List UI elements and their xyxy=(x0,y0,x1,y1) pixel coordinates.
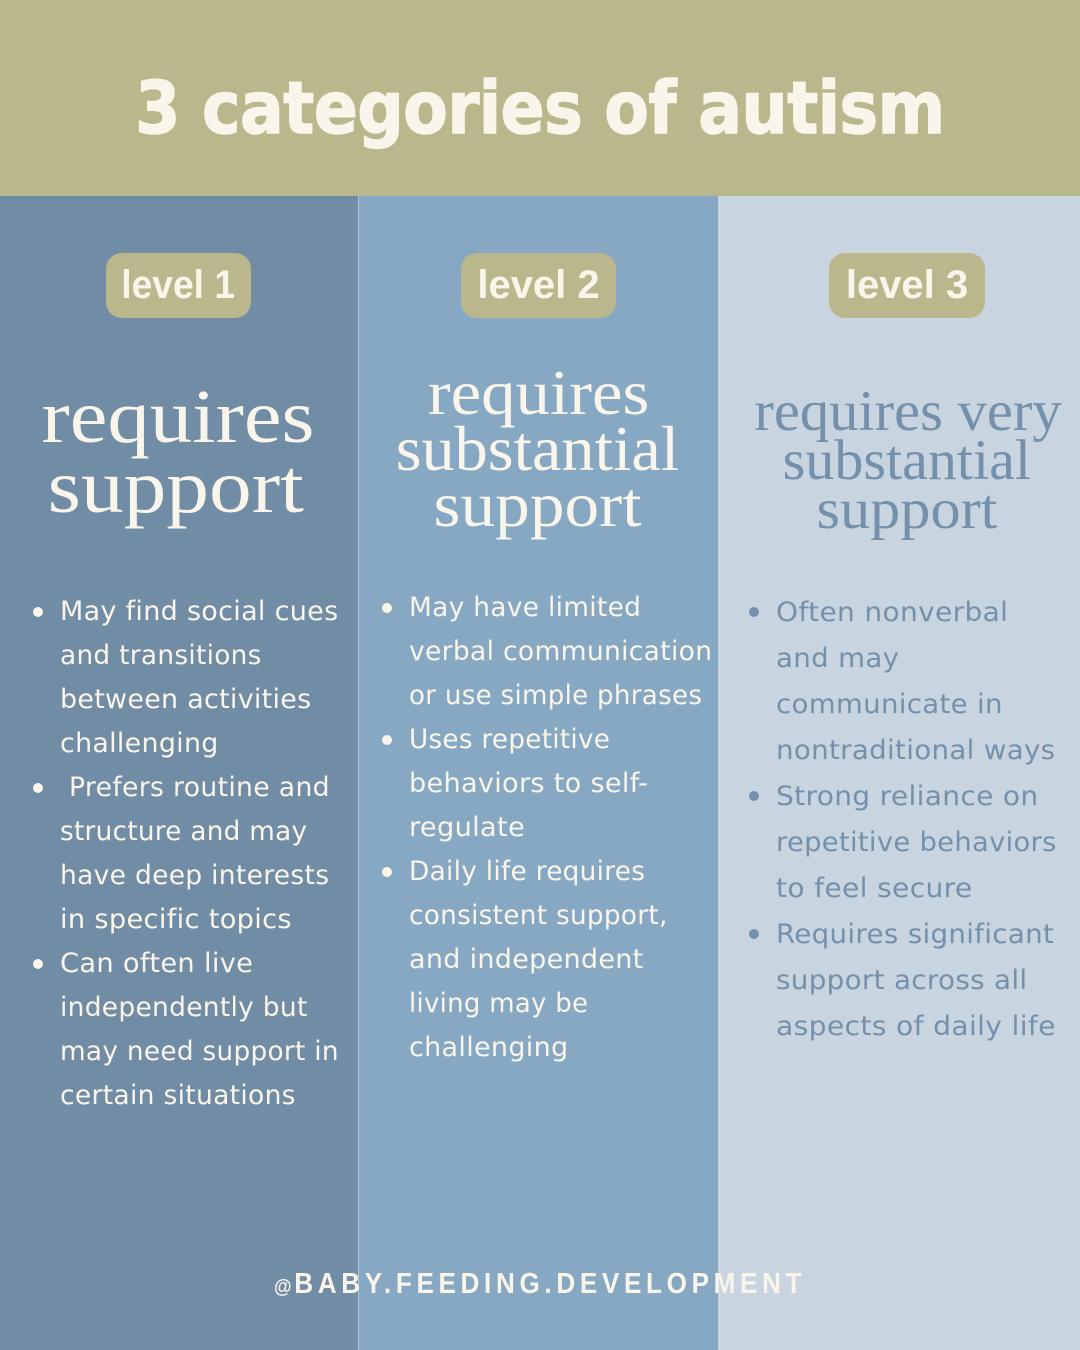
list: level 3 traits: Strong reliance on xyxy=(776,781,1039,812)
heading: requires very substantial support: support xyxy=(816,478,997,541)
list: level 1 traits: structure and may xyxy=(60,816,307,847)
list: level 2 traits: or use simple phrases xyxy=(409,680,702,711)
heading: requires support xyxy=(42,375,314,529)
heading: requires substantial support: requires xyxy=(428,358,649,428)
badge: level 2: level 2 xyxy=(477,263,600,307)
list: level 2 traits: Uses repetitive xyxy=(409,724,610,755)
badge: level 1: level 1 xyxy=(122,263,235,307)
list: level 2 traits: verbal communication xyxy=(409,636,712,667)
panel: level 3 xyxy=(718,196,1080,1350)
list: level 1 traits: May find social cues xyxy=(60,596,338,627)
list: level 2 traits: behaviors to self- xyxy=(409,768,648,799)
list: level 1 traits: in specific topics xyxy=(60,904,292,935)
list: level 1 traits: and transitions xyxy=(60,640,262,671)
list: level 1 traits: Can often live xyxy=(60,948,253,979)
heading: requires very substantial support: requires very xyxy=(754,380,1062,443)
list: level 3 traits: communicate in xyxy=(776,689,1003,720)
list: level 3 traits: to feel secure xyxy=(776,873,973,904)
list: level 1 traits: certain situations xyxy=(60,1080,296,1111)
list: level 3 traits: Requires significant xyxy=(776,919,1054,950)
heading: requires very substantial support: substantial xyxy=(783,429,1031,492)
list: level 2 traits: regulate xyxy=(409,812,525,843)
panel: level 2 xyxy=(359,196,718,1350)
list: level 1 traits: between activities xyxy=(60,684,311,715)
heading: requires substantial support: substantial xyxy=(396,414,679,484)
list: level 1 traits xyxy=(33,596,339,1111)
list: level 1 traits: may need support in xyxy=(60,1036,339,1067)
list: level 3 traits xyxy=(749,597,1057,1042)
badge: level 3: level 3 xyxy=(846,263,968,307)
list: level 3 traits: support across all xyxy=(776,965,1027,996)
heading: requires very substantial support xyxy=(754,380,1062,541)
title banner xyxy=(0,0,1080,196)
list: level 3 traits: repetitive behaviors xyxy=(776,827,1057,858)
list: level 2 traits xyxy=(382,592,712,1063)
heading: requires substantial support: support xyxy=(434,470,641,540)
footer handle: @BABY.FEEDING.DEVELOPMENT xyxy=(274,1268,806,1300)
list: level 2 traits: Daily life requires xyxy=(409,856,645,887)
list: level 3 traits: nontraditional ways xyxy=(776,735,1055,766)
badge: level 2 xyxy=(461,253,616,318)
badge: level 3 xyxy=(829,253,985,318)
list: level 3 traits: and may xyxy=(776,643,899,674)
heading: requires support: requires xyxy=(42,375,314,459)
list: level 1 traits: Prefers routine and xyxy=(69,772,330,803)
list: level 1 traits: independently but xyxy=(60,992,308,1023)
list: level 2 traits: consistent support, xyxy=(409,900,668,931)
list: level 1 traits: have deep interests xyxy=(60,860,329,891)
list: level 2 traits: living may be xyxy=(409,988,588,1019)
title: 3 categories of autism xyxy=(135,66,945,150)
list: level 3 traits: Often nonverbal xyxy=(776,597,1008,628)
badge: level 1 xyxy=(106,253,251,318)
list: level 2 traits: challenging xyxy=(409,1032,568,1063)
panel: level 1 xyxy=(0,196,359,1350)
list: level 1 traits: challenging xyxy=(60,728,219,759)
list: level 2 traits: May have limited xyxy=(409,592,641,623)
heading: requires substantial support xyxy=(396,358,679,540)
list: level 2 traits: and independent xyxy=(409,944,644,975)
heading: requires support: support xyxy=(48,445,304,529)
list: level 3 traits: aspects of daily life xyxy=(776,1011,1056,1042)
